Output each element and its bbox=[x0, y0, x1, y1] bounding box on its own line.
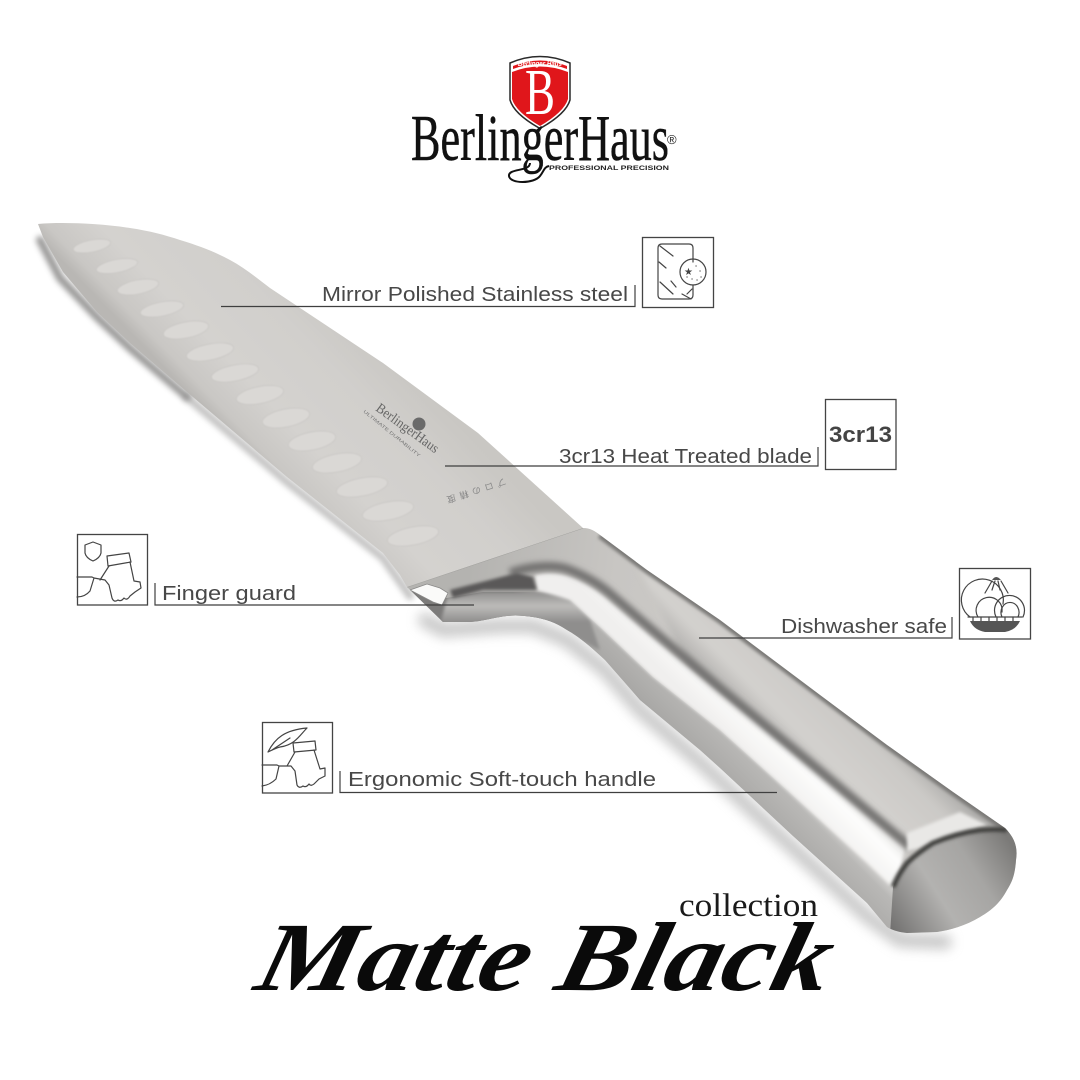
callout: Finger guard: Finger guard bbox=[162, 583, 296, 605]
handle white band bbox=[535, 573, 905, 890]
logo: Berlinger Haus bbox=[411, 56, 677, 182]
callout: Dishwasher safe: Dishwasher safe bbox=[781, 616, 947, 638]
bolster and handle bbox=[407, 528, 1017, 933]
brand name: BerlingerHaus bbox=[411, 102, 669, 175]
callout: Finger guard bbox=[77, 534, 474, 605]
blade engraving: brand: ULTIMATE DURABILITY bbox=[362, 409, 421, 458]
handle dark band bbox=[510, 566, 912, 848]
guard dark recess bbox=[450, 573, 537, 598]
icon: soft touch hand bbox=[262, 722, 332, 793]
collection title bbox=[244, 888, 846, 1012]
blade bbox=[38, 223, 583, 587]
blade engraving: brand: BerlingerHaus bbox=[373, 401, 441, 457]
guard lower steel and lower handle bbox=[410, 590, 895, 940]
callout: 3cr13 Heat Treated blade: 3cr13 Heat Treated blade bbox=[559, 446, 812, 468]
icon: polished steel: ★ bbox=[684, 267, 693, 278]
g descender swash bbox=[509, 163, 549, 182]
callout: Ergonomic Soft-touch handle bbox=[262, 722, 777, 793]
callout: Dishwasher safe bbox=[699, 568, 1030, 639]
callout: 3cr13 Heat Treated blade bbox=[445, 400, 896, 470]
guard highlight bbox=[410, 584, 448, 605]
icon: red shield: Berlinger Haus bbox=[518, 59, 562, 68]
knife bbox=[38, 223, 1040, 950]
pommel highlight bbox=[907, 812, 987, 852]
handle top dark edge bbox=[600, 535, 1005, 828]
pommel dark rim bbox=[893, 829, 1007, 887]
icon: finger guard bbox=[77, 534, 148, 605]
knife shadow bbox=[40, 240, 945, 942]
handle top flat face bbox=[647, 578, 1005, 828]
pommel end cap bbox=[890, 828, 1017, 933]
tagline: PROFESSIONAL PRECISION bbox=[549, 165, 669, 172]
icon: dishwasher bbox=[960, 568, 1030, 639]
icon: 3cr13 badge bbox=[826, 400, 896, 470]
callout: Ergonomic Soft-touch handle: Ergonomic Soft-touch handle bbox=[348, 769, 656, 791]
callout: Mirror Polished Stainless steel: Mirror Polished Stainless steel bbox=[322, 284, 628, 306]
icon: red shield: B bbox=[525, 56, 555, 129]
icon: 3cr13 badge: 3cr13 bbox=[829, 422, 892, 447]
collection word: collection bbox=[679, 888, 818, 924]
icon: polished steel bbox=[642, 238, 714, 308]
blade engraving: Japanese mark: プロの精度 bbox=[445, 475, 508, 507]
Matte Black: Matte Black bbox=[244, 902, 846, 1012]
registered mark: ® bbox=[667, 132, 677, 147]
blade dimples bbox=[72, 236, 440, 550]
bolster seam bbox=[407, 528, 583, 587]
callout: Mirror Polished Stainless steel bbox=[221, 238, 714, 308]
